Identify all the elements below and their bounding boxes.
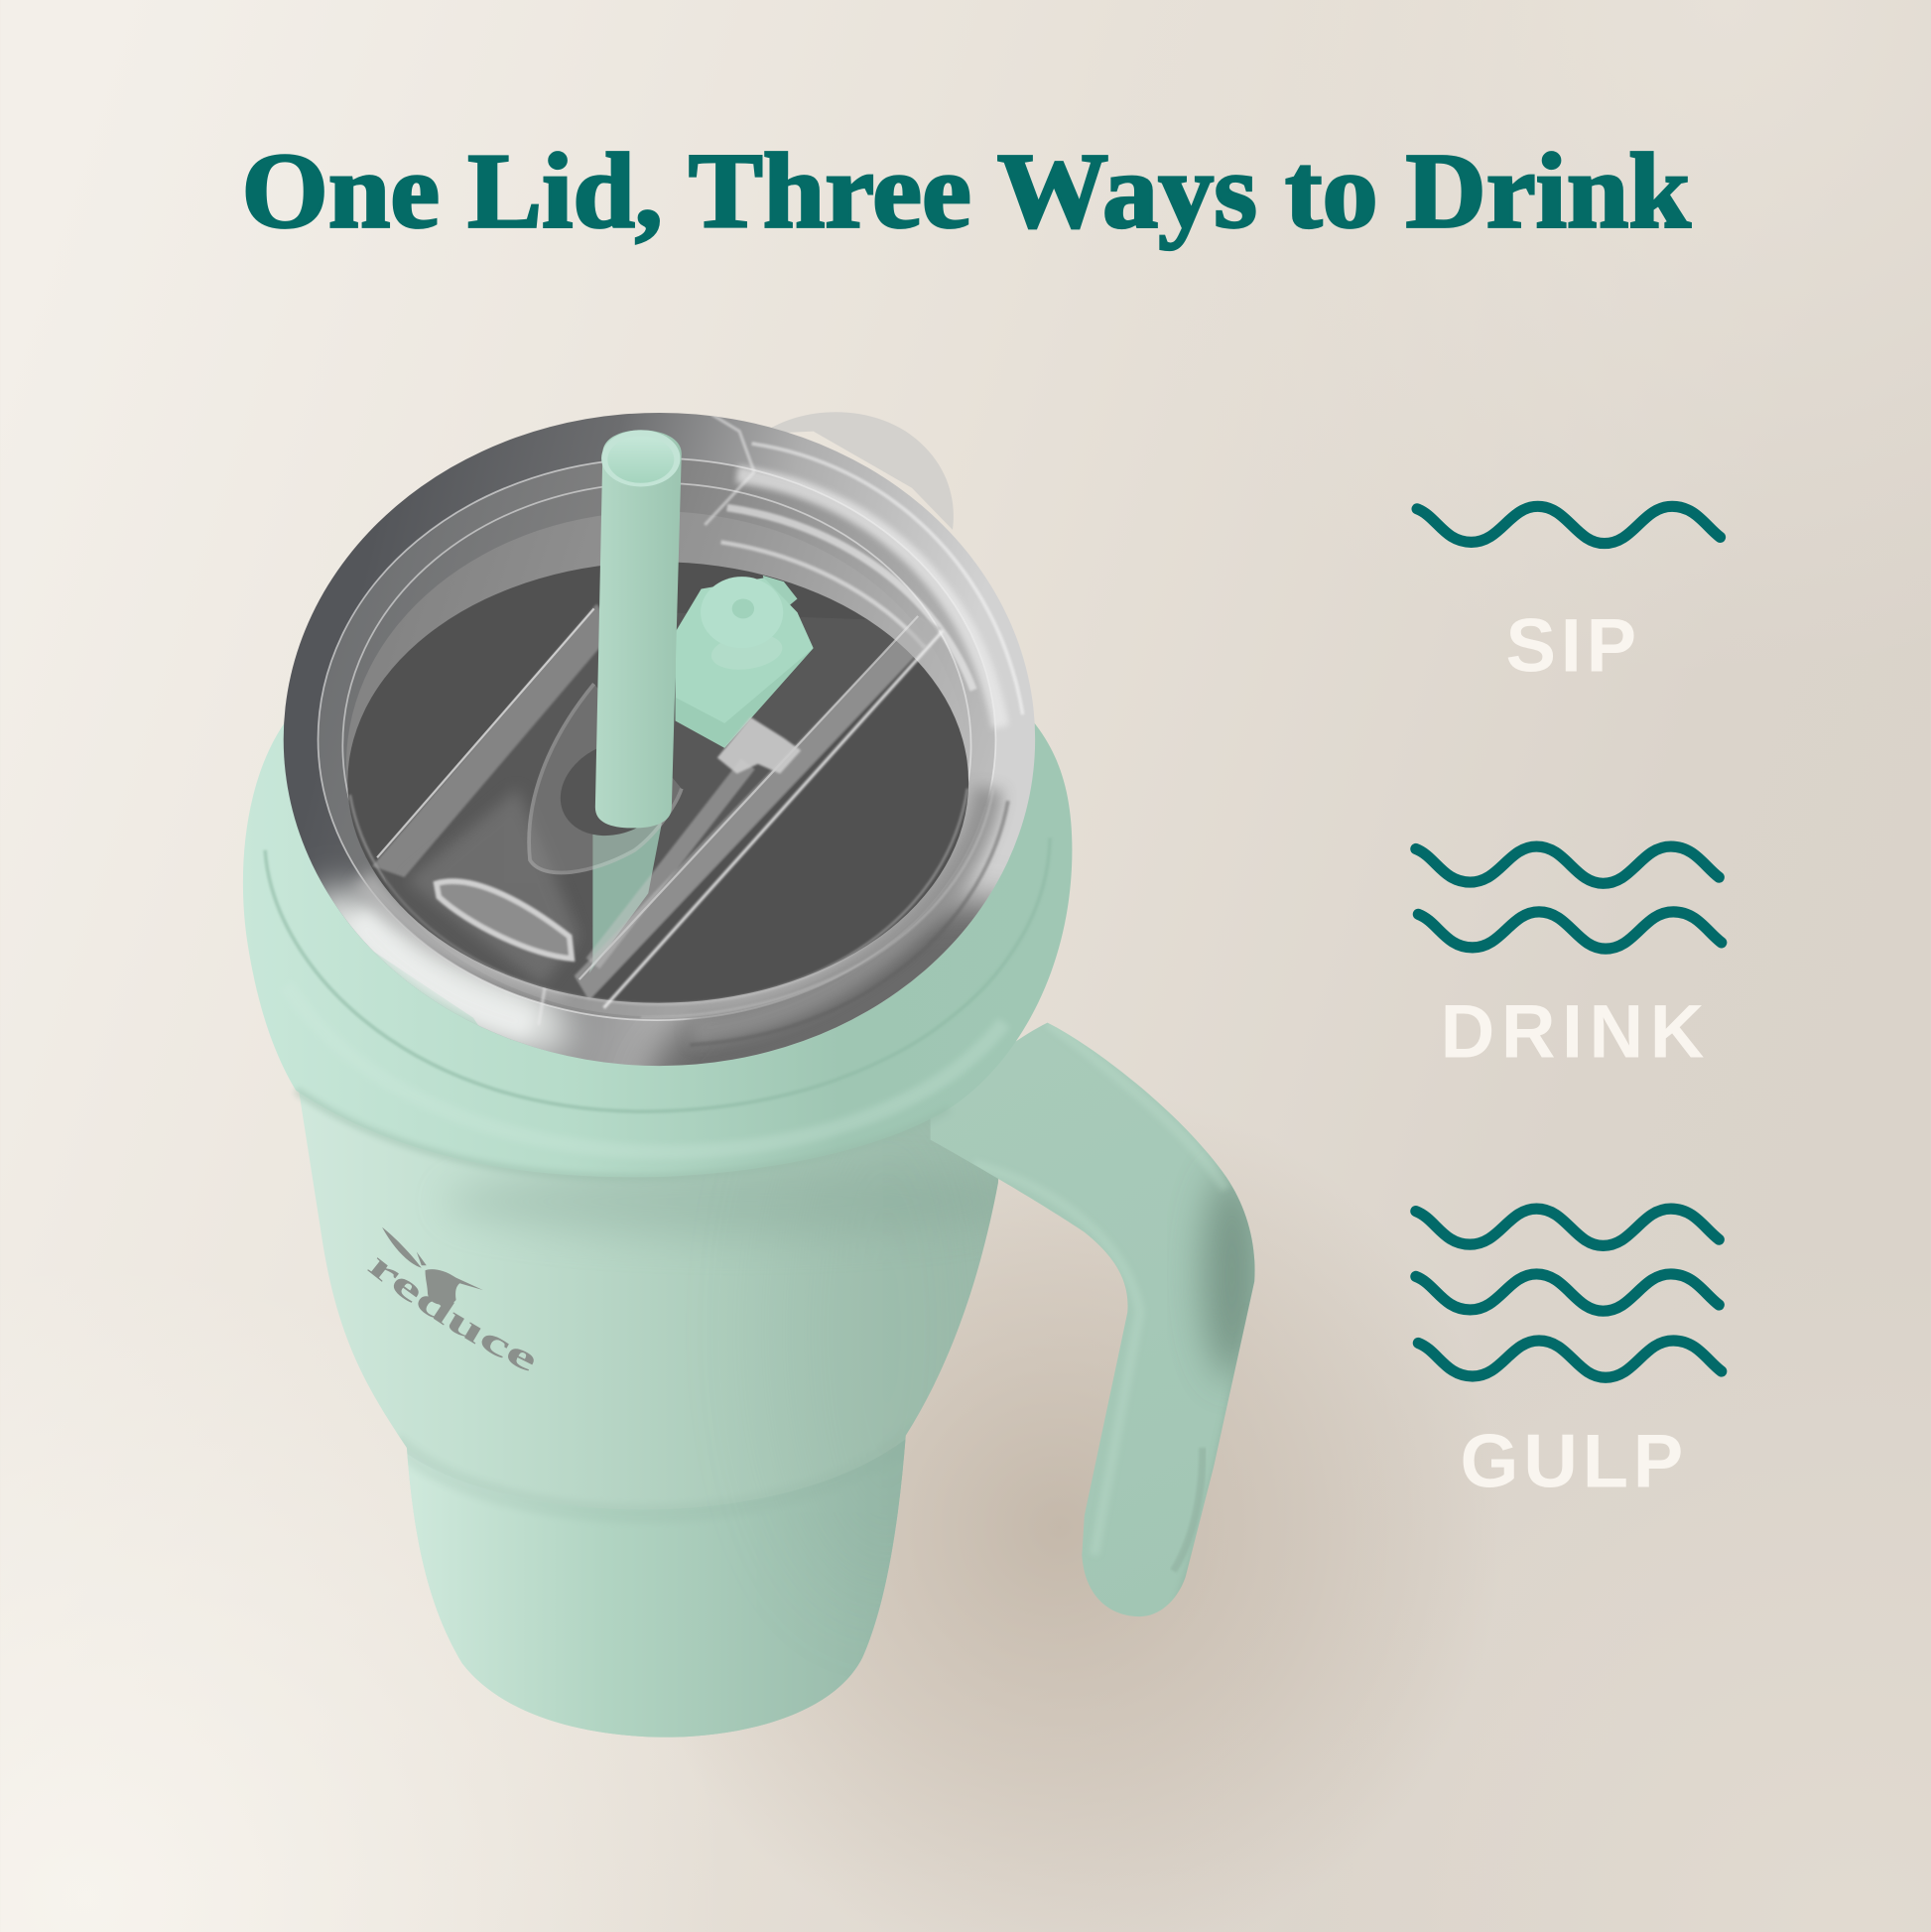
straw xyxy=(595,430,682,828)
logo mark: bird xyxy=(426,1269,483,1305)
icon: two waves xyxy=(1416,846,1722,949)
clear slider channel xyxy=(377,610,949,1004)
slider left bar xyxy=(372,603,616,877)
lower thumb notch xyxy=(437,881,572,959)
logo wordmark: reduce xyxy=(367,1257,534,1371)
clear upper-right arcs xyxy=(737,474,1000,727)
dark tumbler interior xyxy=(347,562,968,1003)
lower straw seen through lid xyxy=(589,823,662,973)
sip flap xyxy=(761,412,954,530)
inner ledge band xyxy=(346,511,967,1016)
scoop around straw opening xyxy=(529,684,682,873)
rim: lower-left bright zone xyxy=(283,858,592,1089)
slider stop block xyxy=(717,717,801,774)
legend: drink xyxy=(1416,846,1722,1074)
icon: one wave xyxy=(1417,506,1721,544)
tumbler product illustration xyxy=(242,412,1255,1738)
handle xyxy=(931,1023,1269,1616)
green stopper xyxy=(676,576,814,748)
rim: lower grey zone xyxy=(617,854,1059,1166)
handle embossed mark xyxy=(1173,1448,1203,1571)
icon: three waves xyxy=(1416,1209,1722,1377)
logo mark: small leaf xyxy=(417,1252,427,1265)
green showing through the lower rim xyxy=(360,949,483,1033)
legend: sip xyxy=(1417,506,1721,689)
label: SIP: SIP xyxy=(1505,604,1636,689)
lower-right streaks xyxy=(690,789,988,1030)
tumbler lower body xyxy=(271,1060,1035,1749)
curve for the logo wordmark xyxy=(366,1269,530,1372)
slider right bar xyxy=(575,616,942,1000)
lid outer rim xyxy=(284,413,1035,1066)
reduce logo xyxy=(367,1227,534,1371)
lower-left clear band xyxy=(363,877,567,985)
inner wall xyxy=(318,458,995,1020)
label: DRINK: DRINK xyxy=(1441,989,1704,1074)
label: GULP: GULP xyxy=(1461,1420,1683,1504)
collar xyxy=(243,720,1072,1177)
title: One Lid, Three Ways to Drink xyxy=(241,132,1691,250)
rim seams xyxy=(539,414,754,1025)
legend: gulp xyxy=(1416,1209,1722,1504)
lid xyxy=(283,412,1059,1166)
logo mark: leaf xyxy=(382,1227,422,1268)
